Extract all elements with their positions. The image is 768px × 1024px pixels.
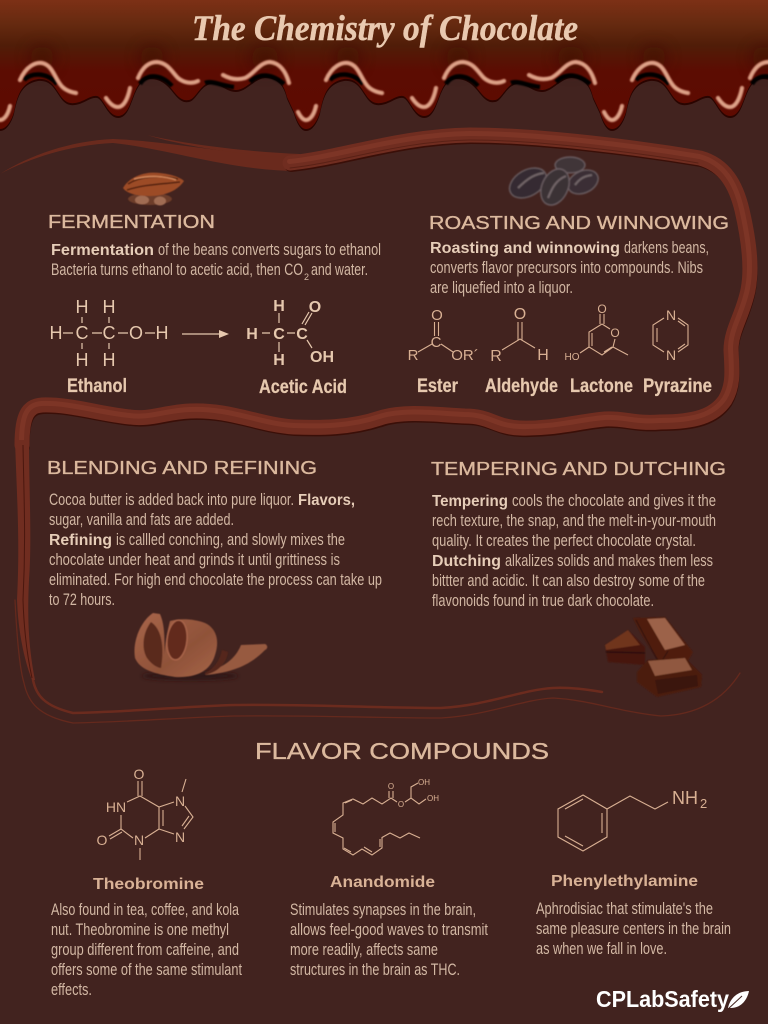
molecule: aldehyde: O	[514, 306, 526, 323]
text: phenylethylamine: as when we fall in love.	[536, 940, 667, 958]
text: anandomide: allows feel-good waves to transmit	[290, 921, 488, 939]
molecule: anandomide	[333, 778, 439, 855]
left taper	[15, 440, 35, 680]
molecule: theobromine: N	[175, 829, 185, 845]
molecule: lactone	[564, 302, 628, 363]
molecule: ethanol: H	[76, 350, 88, 370]
molecule: theobromine: N	[134, 832, 144, 848]
text: roasting: are liquefied into a liquor.	[430, 279, 573, 297]
icon: cocoa pod	[123, 173, 184, 206]
molecule: acetic acid: C	[273, 326, 285, 343]
label: pyrazine: Pyrazine	[643, 376, 712, 397]
molecule: ethanol: H	[102, 350, 116, 370]
molecule: theobromine: O	[134, 766, 145, 782]
text: phenylethylamine	[536, 900, 731, 958]
molecule: ethanol: H	[50, 323, 62, 343]
molecule: anandomide: O	[398, 800, 404, 809]
text: theobromine: group different from caffeine, and	[51, 941, 239, 959]
text: blending: Flavors,	[298, 492, 355, 509]
text: tempering: cools the chocolate and gives it the	[512, 492, 716, 510]
text: phenylethylamine: Aphrodisiac that stimulate's the	[536, 900, 713, 918]
label: lactone: Lactone	[570, 376, 633, 397]
molecule: ethanol: C	[76, 323, 88, 343]
heading: tempering and dutching: TEMPERING AND DUTCHING	[431, 459, 726, 479]
molecule: lactone: O	[597, 302, 607, 316]
molecule: phenylethylamine: 2	[700, 796, 707, 811]
label: ethanol: Ethanol	[67, 376, 127, 397]
molecule: ethanol: H	[156, 323, 168, 343]
molecule: ester: OR´	[451, 347, 479, 364]
text: fermentation: and water.	[311, 261, 368, 279]
molecule: acetic acid: H	[273, 352, 285, 369]
title: The Chemistry of Chocolate	[192, 8, 578, 48]
text: blending: to 72 hours.	[49, 591, 115, 609]
label: aldehyde: Aldehyde	[485, 376, 558, 397]
text: tempering: Dutching	[432, 553, 501, 570]
text: tempering: alkalizes solids and makes them less	[505, 552, 713, 570]
text: blending	[49, 491, 382, 609]
icon: chocolate curl	[134, 613, 267, 680]
heading: roasting and winnowing: ROASTING AND WINNOWING	[429, 213, 729, 233]
molecule: pyrazine	[653, 307, 688, 363]
text: fermentation: 2	[304, 272, 309, 282]
molecule: aldehyde: R	[490, 348, 502, 365]
label: anandomide: Anandomide	[330, 874, 435, 891]
text: tempering: flavonoids found in true dark chocolate.	[432, 592, 654, 610]
molecule: phenylethylamine: NH	[672, 788, 698, 808]
molecule: lactone: O	[610, 326, 620, 340]
text: tempering	[432, 492, 716, 610]
molecule: acetic acid: OH	[310, 349, 334, 366]
label: ester: Ester	[417, 376, 459, 397]
text: fermentation: of the beans converts sugars to ethanol	[158, 241, 381, 259]
text: fermentation: Bacteria turns ethanol to acetic acid, then CO	[51, 261, 303, 279]
text: tempering: Tempering	[432, 493, 508, 510]
molecule: theobromine: HN	[106, 799, 126, 815]
molecule: ester	[408, 307, 479, 364]
logo: CPLabSafety	[596, 986, 729, 1012]
molecule: acetic acid: H	[273, 298, 285, 315]
molecule: ethanol: C	[102, 323, 116, 343]
text: roasting: Roasting and winnowing	[430, 240, 620, 257]
molecule: ester: R	[408, 347, 419, 364]
text: roasting	[430, 239, 709, 297]
heading: fermentation: FERMENTATION	[48, 212, 215, 232]
text: anandomide: structures in the brain as THC.	[290, 961, 460, 979]
text: blending: eliminated. For high end chocolate the process can take up	[49, 571, 382, 589]
text: theobromine	[51, 901, 242, 999]
molecule: lactone: HO	[564, 352, 580, 363]
label: acetic acid: Acetic Acid	[259, 377, 347, 398]
text: fermentation	[51, 241, 381, 282]
text: theobromine: nut. Theobromine is one methyl	[51, 921, 229, 939]
chocolate swirl frame	[0, 134, 751, 723]
text: blending: chocolate under heat and grinds it until grittiness is	[49, 551, 340, 569]
molecule: acetic acid: H	[246, 326, 258, 343]
icon: roasted cocoa beans	[504, 157, 602, 210]
molecule: pyrazine: N	[666, 347, 676, 363]
molecule: ethanol: O	[129, 323, 143, 343]
molecule: aldehyde: H	[537, 347, 549, 364]
molecule: anandomide: O	[388, 782, 394, 791]
molecule: ethanol: H	[102, 297, 116, 317]
text: theobromine: effects.	[51, 981, 92, 999]
text: fermentation: Fermentation	[51, 242, 154, 259]
text: theobromine: Also found in tea, coffee, and kola	[51, 901, 240, 919]
molecule: pyrazine: N	[666, 307, 676, 323]
text: roasting: darkens beans,	[624, 239, 709, 257]
text: theobromine: offers some of the same stimulant	[51, 961, 242, 979]
text: anandomide: Stimulates synapses in the brain,	[290, 901, 476, 919]
molecule: anandomide: OH	[418, 778, 430, 787]
heading: flavor compounds: FLAVOR COMPOUNDS	[255, 738, 549, 764]
text: anandomide: more readily, affects same	[290, 941, 438, 959]
text: blending: sugar, vanilla and fats are added.	[49, 511, 234, 529]
chocolate drip header	[0, 0, 768, 131]
text: blending: Cocoa butter is added back into pure liquor.	[49, 491, 294, 509]
icon: chocolate pieces	[605, 617, 702, 697]
molecule: ester: C	[431, 334, 442, 351]
molecule: acetic acid: C	[296, 326, 308, 343]
label: phenylethylamine: Phenylethylamine	[551, 873, 698, 890]
text: blending: is callled conching, and slowly mixes the	[116, 531, 345, 549]
molecule: ester: O	[431, 307, 443, 324]
label: theobromine: Theobromine	[93, 876, 204, 893]
molecule: theobromine: O	[97, 832, 108, 848]
molecule: ethanol: H	[76, 297, 88, 317]
top tail	[0, 139, 300, 174]
molecule: acetic acid: O	[309, 299, 321, 316]
molecule: theobromine: N	[175, 793, 185, 809]
molecule: aldehyde	[490, 306, 549, 365]
molecule: theobromine	[97, 766, 193, 860]
arrow	[182, 330, 229, 338]
molecule: anandomide: OH	[427, 794, 439, 803]
molecule: ethanol	[50, 297, 168, 370]
heading: blending and refining: BLENDING AND REFINING	[47, 458, 317, 478]
text: blending: Refining	[49, 532, 112, 549]
molecule: phenylethylamine	[558, 788, 707, 851]
molecule: acetic acid	[246, 298, 334, 369]
text: tempering: quality. It creates the perfect chocolate crystal.	[432, 532, 696, 550]
text: anandomide	[290, 901, 488, 979]
